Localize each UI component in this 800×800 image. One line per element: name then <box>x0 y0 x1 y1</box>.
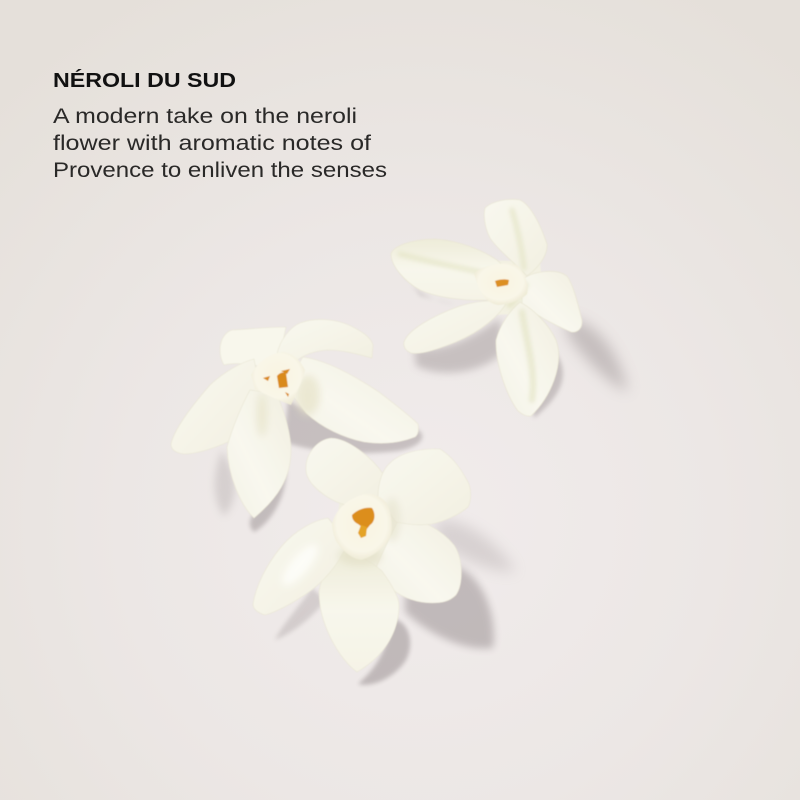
flower cup <box>332 494 392 560</box>
flower cup <box>474 263 528 305</box>
description text: A modern take on the neroli <box>53 105 357 128</box>
flower: top right <box>391 199 582 416</box>
petal: left <box>253 518 346 615</box>
petal: lower left <box>404 301 507 353</box>
petal: left <box>391 239 515 300</box>
stamen <box>263 369 290 397</box>
description text: flower with aromatic notes of <box>53 132 371 155</box>
petal: top left <box>306 438 386 505</box>
petal: right <box>522 271 582 332</box>
petal: bottom <box>319 550 399 672</box>
petal: bottom <box>496 302 559 416</box>
petal: left <box>171 359 260 454</box>
description text: Provence to enliven the senses <box>53 159 387 182</box>
heading: NÉROLI DU SUD <box>53 69 236 92</box>
flower shadows <box>215 268 628 685</box>
stamen <box>352 508 374 538</box>
petal highlights <box>276 498 400 591</box>
petal: top right <box>378 449 471 525</box>
flower base <box>480 260 545 315</box>
petal shading <box>257 375 320 437</box>
petal: top right <box>277 319 373 362</box>
petal: right <box>290 357 418 443</box>
petal: top left <box>220 327 286 366</box>
petal: top <box>484 199 547 276</box>
stamen <box>495 279 509 287</box>
flower: left <box>171 319 418 518</box>
flower: bottom <box>253 438 471 672</box>
flower base <box>330 500 400 570</box>
petal veins <box>400 210 533 400</box>
description text <box>53 105 387 182</box>
petal: bottom <box>227 390 291 518</box>
flower cup <box>251 352 305 405</box>
petal: lower right <box>376 516 461 603</box>
